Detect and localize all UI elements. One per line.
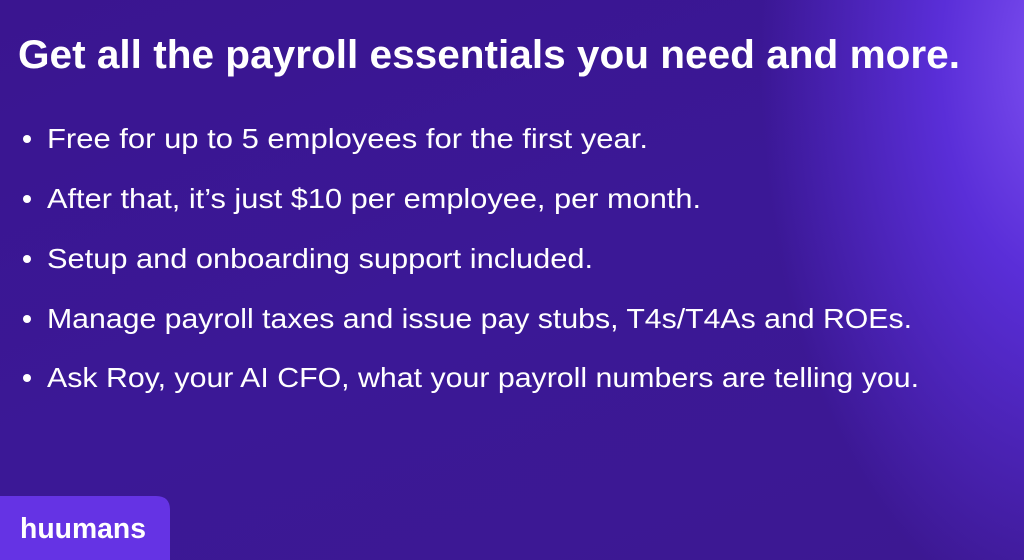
- bullet 3: Setup and onboarding support included.: [47, 243, 593, 274]
- bullet 2: After that, it’s just $10 per employee, per month.: [47, 183, 701, 214]
- title: Get all the payroll essentials you need and more.: [18, 33, 960, 77]
- bullet list: [23, 123, 919, 393]
- logo panel: [0, 496, 170, 560]
- bullet 5: Ask Roy, your AI CFO, what your payroll numbers are telling you.: [47, 362, 919, 393]
- bullet 1: Free for up to 5 employees for the first year.: [47, 123, 648, 154]
- bullet 4: Manage payroll taxes and issue pay stubs, T4s/T4As and ROEs.: [47, 303, 912, 334]
- logo text: huumans: [20, 513, 146, 545]
